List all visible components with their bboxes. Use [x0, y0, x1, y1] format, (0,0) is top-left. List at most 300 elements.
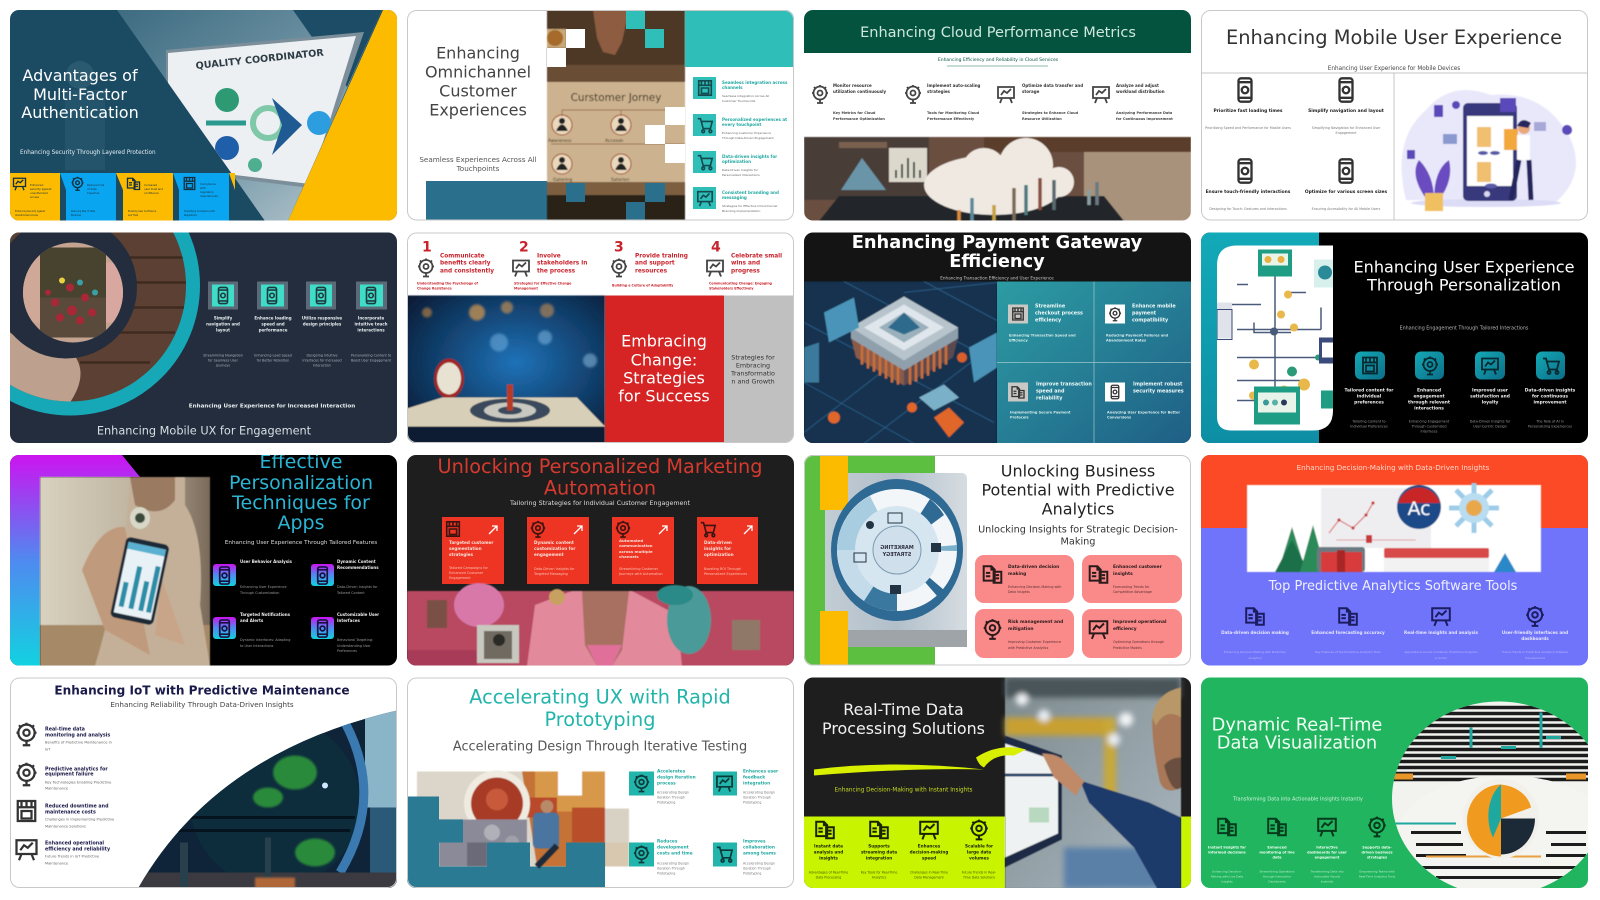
insight tiles: with Predictive Analytics [1008, 646, 1049, 650]
feature columns: volumes [969, 856, 989, 860]
benefit list: Iteration Through [743, 866, 771, 870]
subtitle: Enhancing User Experience Through Tailored Features [225, 540, 377, 546]
benefit tiles: Enhanced [30, 183, 44, 187]
technique list: Preferences [337, 649, 357, 653]
feature list: Enhancing Customer Experience [722, 131, 771, 135]
benefit list: process [657, 780, 676, 786]
insight tiles: Optimizing Operations through [1113, 640, 1164, 644]
photo: quality coordinator certificate: QUALITY COORDINATOR [195, 48, 325, 72]
feature columns: Data Processing [816, 876, 841, 880]
benefit tiles: Enhancing Security Against [15, 210, 45, 213]
tool list: Enhanced forecasting accuracy [1311, 630, 1385, 635]
title: Unlocking Personalized Marketing [438, 455, 762, 478]
benefit tiles: regulatory [200, 190, 214, 194]
feature columns: Supports [868, 844, 890, 848]
UX feature columns: Enhance loading [254, 316, 292, 320]
tool list: Key Features of Top Predictive Analytics Tools [1315, 650, 1381, 654]
metric tips: storage [1022, 89, 1040, 94]
UX feature columns: layout [216, 328, 230, 332]
benefit columns: engagement [1413, 394, 1445, 400]
insight tiles: Enhanced customer [1113, 564, 1163, 570]
benefit tiles: of data [87, 187, 97, 191]
benefit list: integration [743, 780, 770, 786]
title: Accelerating UX with Rapid [469, 686, 731, 708]
feature list: messaging [722, 195, 747, 200]
benefit columns: The Role of AI in [1535, 420, 1564, 424]
feature list: Data-Driven Insights for [722, 168, 759, 172]
feature columns: data [1273, 856, 1282, 860]
feature list: Seamless Integration Across All [722, 94, 769, 98]
benefit tiles: and Trust [128, 214, 138, 217]
metric tips: Resource Utilization [1022, 117, 1062, 121]
benefit columns: Data-Driven Insights for [1470, 420, 1511, 424]
title: for Success [618, 386, 710, 406]
title: Top Predictive Analytics Software Tools [1268, 579, 1518, 594]
change steps: the process [537, 268, 576, 274]
change steps: Change Resistance [417, 286, 453, 290]
benefit columns: for continuous [1532, 394, 1568, 400]
feature list: Branding Implementation [722, 209, 760, 213]
UX feature columns: performance [259, 328, 288, 332]
change steps: Involve [537, 254, 561, 260]
benefits list: Maintenance Solutions [45, 824, 86, 828]
yellow wedge [288, 10, 397, 221]
insight tiles: Enhancing Decision-Making with [1008, 585, 1061, 589]
benefit tiles: requirements [200, 194, 219, 198]
UX feature columns: Enhancing Load Speed [254, 354, 292, 358]
title: Enhancing [436, 44, 520, 62]
teal action panel: Enhancing Transaction Speed and [1009, 334, 1076, 338]
feature columns: dashboards for user [1307, 850, 1347, 854]
subtitle: Strategies for [731, 354, 775, 362]
title: Customer [439, 82, 517, 100]
feature list: Through Data-Driven Engagement [721, 136, 774, 140]
tool list: dashboards [1521, 636, 1549, 641]
title: Automation [544, 476, 656, 500]
benefit columns: Data-driven insights [1525, 388, 1576, 394]
metric tips: workload distribution [1116, 89, 1165, 94]
photo: quality coordinator certificate [110, 10, 400, 221]
benefit list: Iteration Through [657, 796, 685, 800]
subtitle: Accelerating Design Through Iterative Testing [453, 740, 747, 754]
title: Enhancing Payment Gateway [852, 232, 1143, 253]
technique list: and Alerts [240, 618, 264, 623]
feature columns: Future Trends in Real- [962, 870, 996, 874]
UX feature columns: design principles [303, 322, 342, 326]
benefits list: monitoring and analysis [45, 732, 110, 738]
benefit columns: Individual Preferences [1350, 424, 1388, 428]
benefits list: maintenance costs [45, 810, 96, 816]
subtitle: Enhancing Engagement Through Tailored Interactions [1400, 326, 1529, 332]
card: Dynamic Real-Time Data Visualization [1201, 678, 1600, 900]
insight tiles: Predictive Models [1113, 646, 1142, 650]
title: Strategies [623, 368, 705, 388]
card: Enhancing Cloud Performance Metrics [804, 10, 1191, 221]
feature columns: Supports data- [1362, 846, 1392, 850]
card: Enhancing IoT with Predictive Maintenance [10, 678, 397, 888]
title: Data Visualization [1217, 732, 1377, 754]
subtitle: Enhancing Reliability Through Data-Driven Insights [110, 700, 294, 709]
benefit tiles: Compliance [200, 182, 216, 186]
photo: woman in pink blazer [407, 583, 794, 666]
strategy tiles: Automated [619, 538, 643, 543]
strategy tiles: Targeted customer [449, 540, 494, 545]
feature columns: Advantages of Real-Time [809, 870, 848, 874]
benefits list: Key Technologies Enabling Predictive [45, 780, 112, 784]
feature columns: large data [967, 850, 991, 854]
title: Change: [631, 350, 697, 370]
benefit columns: preferences [1354, 400, 1384, 406]
teal action panel: security measures [1133, 388, 1184, 394]
UX feature columns: Personalizing Content to [351, 354, 391, 358]
card: Embracing Change [407, 232, 794, 444]
benefit tiles: Reduced risk [87, 183, 105, 187]
insight tiles: making [1008, 571, 1026, 577]
insight tiles: Data-driven decision [1008, 564, 1059, 570]
benefit list: Iteration Through [743, 796, 771, 800]
tool list: Analytics [1248, 656, 1262, 660]
subtitle: Unlocking Insights for Strategic Decision- [978, 524, 1178, 536]
insight tiles: Improving Customer Experience [1008, 640, 1061, 644]
feature columns: Enhancing Decision- [1212, 870, 1242, 874]
white flow diagram panel [1217, 246, 1336, 430]
feature columns: Interactive [1316, 846, 1338, 850]
UX feature columns: Incorporate [358, 316, 384, 320]
metric tips [812, 83, 1173, 121]
feature columns: Streamlining Operations [1259, 870, 1295, 874]
benefit columns: individual [1357, 394, 1382, 400]
strategy tiles: Enhanced Customer [449, 571, 484, 575]
teal action panel: Protocols [1010, 416, 1029, 420]
technique list: User Behavior Analysis [240, 559, 292, 564]
subtitle: Embracing [736, 362, 770, 370]
tips grid: Simplifying Navigation for Enhanced User [1312, 126, 1381, 130]
metric tips: Implement auto-scaling [927, 83, 981, 88]
teal action panel: reliability [1036, 396, 1063, 402]
title: Advantages of [22, 66, 138, 85]
strategy tiles: Data-driven [704, 540, 732, 545]
technique list: Dynamic Interfaces: Adapting [240, 638, 290, 642]
title: Omnichannel [425, 62, 531, 82]
change steps: 3 [614, 240, 624, 256]
card: Effective Personalization Techniques for Apps [10, 451, 397, 666]
tool list: User-friendly interfaces and [1502, 630, 1568, 635]
top subtitle: Enhancing Decision-Making with Data-Driven Insights [1297, 463, 1490, 472]
title: Techniques for [231, 492, 370, 514]
UX feature columns: intuitive touch [354, 322, 388, 326]
benefit columns [1345, 352, 1576, 434]
benefit tiles: Simplifying Compliance with [184, 210, 216, 213]
technique list: Behavioral Targeting: [337, 638, 373, 642]
benefit tiles: Reducing Risk of Data [71, 210, 96, 213]
UX feature columns: speed and [261, 322, 285, 326]
tips grid: Simplify navigation and layout [1308, 108, 1384, 114]
feature columns: Enhances [918, 844, 941, 848]
change steps: Celebrate small [731, 254, 782, 260]
benefits list: Maintenance [45, 786, 69, 790]
strategy tiles: across multiple [619, 549, 653, 554]
benefit list: Prototyping [743, 800, 761, 804]
red title panel [605, 296, 724, 444]
technique list: Recommendations [337, 565, 379, 570]
change steps: resources [635, 268, 668, 274]
teal action panel: efficiency [1035, 318, 1062, 324]
title: Authentication [21, 103, 139, 122]
strategy tiles: insights for [704, 546, 732, 551]
UX feature columns: Journeys [215, 364, 230, 368]
illustration: isometric bank [804, 282, 997, 444]
tips grid: Ensure touch-friendly interactions [1206, 189, 1291, 195]
change steps: 4 [711, 240, 721, 256]
subtitle: Making [1061, 536, 1095, 548]
strategy tiles [442, 517, 758, 584]
designer figure [533, 800, 559, 866]
gradient frame [10, 455, 140, 666]
insight tiles: efficiency [1113, 626, 1137, 632]
benefit list: Accelerates [657, 768, 686, 774]
change steps: Stakeholders Effectively [709, 286, 754, 290]
benefit tiles: unauthorized [30, 191, 48, 195]
photo: cloud on laptop [804, 137, 1191, 221]
feature list: optimization [722, 159, 751, 164]
metric tips: Analyzing Performance Data [1116, 111, 1173, 115]
title: Unlocking Business [1001, 462, 1155, 480]
subtitle: Transforming Data into Actionable Insights Instantly [1232, 796, 1363, 802]
photo: customer journey board: Awareness [548, 138, 572, 144]
benefits list: Real-time data [45, 726, 85, 732]
mirrored wheel label: STRATEGY [882, 552, 911, 558]
benefits list: Maintenance [45, 862, 69, 866]
technique list: Enhancing User Experience [240, 585, 287, 589]
benefit tiles: security against [30, 187, 52, 191]
technique list: Dynamic Content [337, 559, 376, 564]
feature columns: driven business [1361, 850, 1393, 854]
grey panel [724, 296, 794, 444]
feature columns [809, 820, 996, 880]
feature columns: Actionable Visuals [1314, 874, 1341, 878]
benefit tiles [10, 173, 235, 221]
tips grid: Prioritize fast loading times [1213, 108, 1283, 114]
change steps: stakeholders in [537, 260, 587, 266]
metric tips: utilization continuously [833, 89, 886, 94]
benefits list: Predictive analytics for [45, 766, 108, 772]
feature list: Data-driven insights for [722, 154, 777, 159]
UX feature columns: for Seamless User [208, 358, 239, 362]
feature columns: Instantly [1321, 880, 1334, 884]
illustration: analytics dashboard: Ac [1407, 498, 1431, 520]
strategy tiles: communication [619, 543, 653, 548]
card: Unlocking Business Potential with Predictive Analytics [804, 455, 1191, 666]
title: Embracing [621, 332, 707, 350]
benefits list: equipment failure [45, 772, 94, 778]
benefit tiles: Boosting User Confidence [128, 210, 157, 213]
subtitle: Enhancing User Experience for Increased Interaction [189, 404, 355, 410]
feature list [693, 77, 788, 213]
tips grid: Prioritizing Speed and Performance for Mobile Users [1205, 126, 1291, 130]
tool list [1221, 606, 1568, 660]
insight tiles: Competitive Advantage [1113, 590, 1152, 594]
subtitle: Tailoring Strategies for Individual Customer Engagement [509, 500, 690, 507]
teal action panel: compatibility [1132, 318, 1169, 324]
subtitle: Enhancing Transaction Efficiency and User Experience [940, 276, 1054, 280]
strategy tiles: Engagement [449, 576, 471, 580]
benefits list: Future Trends in IoT Predictive [45, 854, 100, 858]
title: Enhancing IoT with Predictive Maintenance [54, 684, 350, 698]
benefit tiles: with [200, 186, 206, 190]
feature columns: Instant data [814, 844, 843, 848]
feature columns: monitoring of live [1259, 850, 1295, 854]
subtitle: Enhancing Efficiency and Reliability in Cloud Services [938, 57, 1059, 63]
benefit tiles: Regulations [184, 214, 198, 217]
card: Enhancing Payment Gateway Efficiency [804, 232, 1191, 444]
benefit list: Prototyping [743, 872, 761, 876]
feature columns: analysis and [814, 850, 843, 854]
feature columns: Making with Live Data [1211, 874, 1243, 878]
feature columns: Analytics [872, 876, 887, 880]
teal panel [685, 10, 794, 67]
photo: customer journey board: Curstomer Jorney [571, 92, 661, 104]
photo: hand holding phone [40, 477, 210, 666]
benefit list: Iteration Through [657, 866, 685, 870]
strategy tiles: Data-Driven Insights for [534, 567, 575, 571]
benefit tiles: Unauthorized Access [15, 214, 39, 217]
insight tiles: mitigation [1008, 626, 1034, 632]
metric tips: Monitor resource [833, 83, 872, 88]
subtitle: Seamless Experiences Across All [419, 155, 537, 164]
benefit columns: Through Customized [1410, 424, 1447, 428]
change steps: benefits clearly [440, 260, 491, 266]
insight tiles: Data Insights [1008, 590, 1030, 594]
strategy tiles: strategies [449, 552, 473, 557]
change steps: Strategies for Effective Change [514, 282, 572, 286]
teal action panel: checkout process [1035, 310, 1083, 316]
feature columns: Scalable for [965, 844, 994, 848]
tool list: Future Trends in Predictive Analytics Software [1502, 650, 1568, 654]
benefit list: development [657, 844, 689, 850]
benefit columns: User-Centric Design [1473, 424, 1507, 428]
subtitle: Transformatio [730, 370, 775, 378]
feature list: channels [722, 85, 743, 90]
UX feature columns: for Better Retention [257, 358, 289, 362]
change steps: 2 [519, 240, 529, 256]
feature columns: streaming data [861, 850, 897, 854]
teal action panel: Conversions [1107, 416, 1131, 420]
UX feature columns: Simplify [214, 316, 233, 320]
UX feature columns [203, 282, 392, 368]
benefit tiles: access [30, 195, 40, 199]
metric tips: for Continuous Improvement [1116, 117, 1173, 121]
benefits list: efficiency and reliability [45, 846, 111, 852]
technique list: Interfaces [337, 618, 360, 623]
strategy tiles: customization for [534, 546, 576, 551]
benefit list: feedback [743, 774, 765, 780]
strategy tiles: segmentation [449, 546, 482, 551]
technique list: Tailored Content [336, 591, 365, 595]
feature columns: strategies [1367, 856, 1387, 860]
photo: engineer at touch screen [1005, 678, 1181, 888]
benefit list: Enhances user [743, 768, 779, 774]
photo: customer journey board: Saterion [611, 177, 630, 183]
card: Advantages of Multi-Factor Authentication [10, 10, 400, 221]
teal action panel: Improve transaction [1036, 382, 1092, 388]
benefits list: IoT [45, 748, 51, 752]
feature list: Personalized experiences at [722, 117, 787, 122]
tool list: in Action [1435, 656, 1447, 660]
title: Enhancing Cloud Performance Metrics [860, 25, 1136, 41]
feature columns: integration [866, 856, 892, 860]
metric tips: Optimize data transfer and [1022, 83, 1083, 88]
benefits list: Enhanced operational [45, 840, 104, 846]
strategy tiles: Dynamic content [534, 540, 574, 545]
card: Accelerating UX with Rapid Prototyping [407, 678, 794, 888]
benefit list: Prototyping [657, 872, 675, 876]
feature columns: Empowering Teams with [1359, 870, 1395, 874]
tool list: Data-driven decision making [1221, 630, 1289, 635]
teal action panel [997, 282, 1191, 444]
technique list: Customizable User [337, 612, 379, 617]
benefit columns: improvement [1533, 400, 1567, 406]
strategy tiles: Streamlining Customer [619, 567, 659, 571]
title: Personalization [229, 472, 373, 494]
mirrored wheel label: MARKETING [880, 545, 914, 551]
change steps: and consistently [440, 268, 494, 274]
title: Potential with Predictive [981, 480, 1175, 500]
feature columns: through Interactive [1263, 874, 1291, 878]
change steps: Understanding the Psychology of [417, 282, 479, 286]
tool list: Real-time insights and analysis [1404, 630, 1478, 635]
benefit tiles: breaches [87, 191, 100, 195]
metric tips: Strategies to Enhance Cloud [1022, 111, 1079, 115]
teal action panel: Analyzing User Experience for Better [1107, 410, 1180, 414]
subtitle: Enhancing User Experience for Mobile Devices [1328, 66, 1460, 72]
strategy tiles: Tailored Campaigns for [448, 566, 489, 570]
title: Analytics [1042, 500, 1114, 518]
benefit columns: Enhancing Engagement [1409, 420, 1450, 424]
insight tiles: Risk management and [1008, 619, 1063, 625]
metric tips: strategies [927, 89, 951, 94]
subtitle: n and Growth [731, 378, 775, 386]
change steps: Management [514, 286, 538, 290]
benefit columns: Personalizing Experiences [1528, 424, 1572, 428]
benefit columns: satisfaction and [1470, 394, 1510, 400]
insight tiles: insights [1113, 571, 1133, 577]
teal action panel: Implement robust [1133, 382, 1183, 388]
technique list: Understanding User [337, 644, 371, 648]
title: Enhancing Mobile UX for Engagement [97, 424, 312, 438]
technique list [213, 559, 379, 653]
tool list: Development [1525, 656, 1546, 660]
title: Effective [260, 451, 342, 473]
teal action panel: Implementing Secure Payment [1010, 410, 1071, 414]
benefit list: Accelerating Design [657, 862, 689, 866]
brush arrow [814, 747, 1026, 776]
tips grid: Engagement [1335, 131, 1357, 135]
benefits list: Benefits of Predictive Maintenance in [45, 740, 112, 744]
tool list: Enhancing Decision-Making with Predictive [1224, 650, 1286, 654]
technique list: Targeted Notifications [240, 612, 291, 617]
strategy tiles: Boosting ROI Through [704, 567, 741, 571]
benefits list: Reduced downtime and [45, 804, 109, 810]
tips grid: Optimize for various screen sizes [1305, 189, 1388, 195]
title: Through Personalization [1366, 276, 1561, 294]
title: Enhancing User Experience [1353, 258, 1575, 276]
green and yellow frame [804, 455, 935, 666]
header band [804, 10, 1191, 53]
benefit list: Accelerating Design [743, 862, 775, 866]
subtitle: Touchpoints [456, 164, 500, 173]
feature columns: Instant insights for [1208, 846, 1246, 850]
feature list: Seamless integration across [722, 80, 788, 85]
